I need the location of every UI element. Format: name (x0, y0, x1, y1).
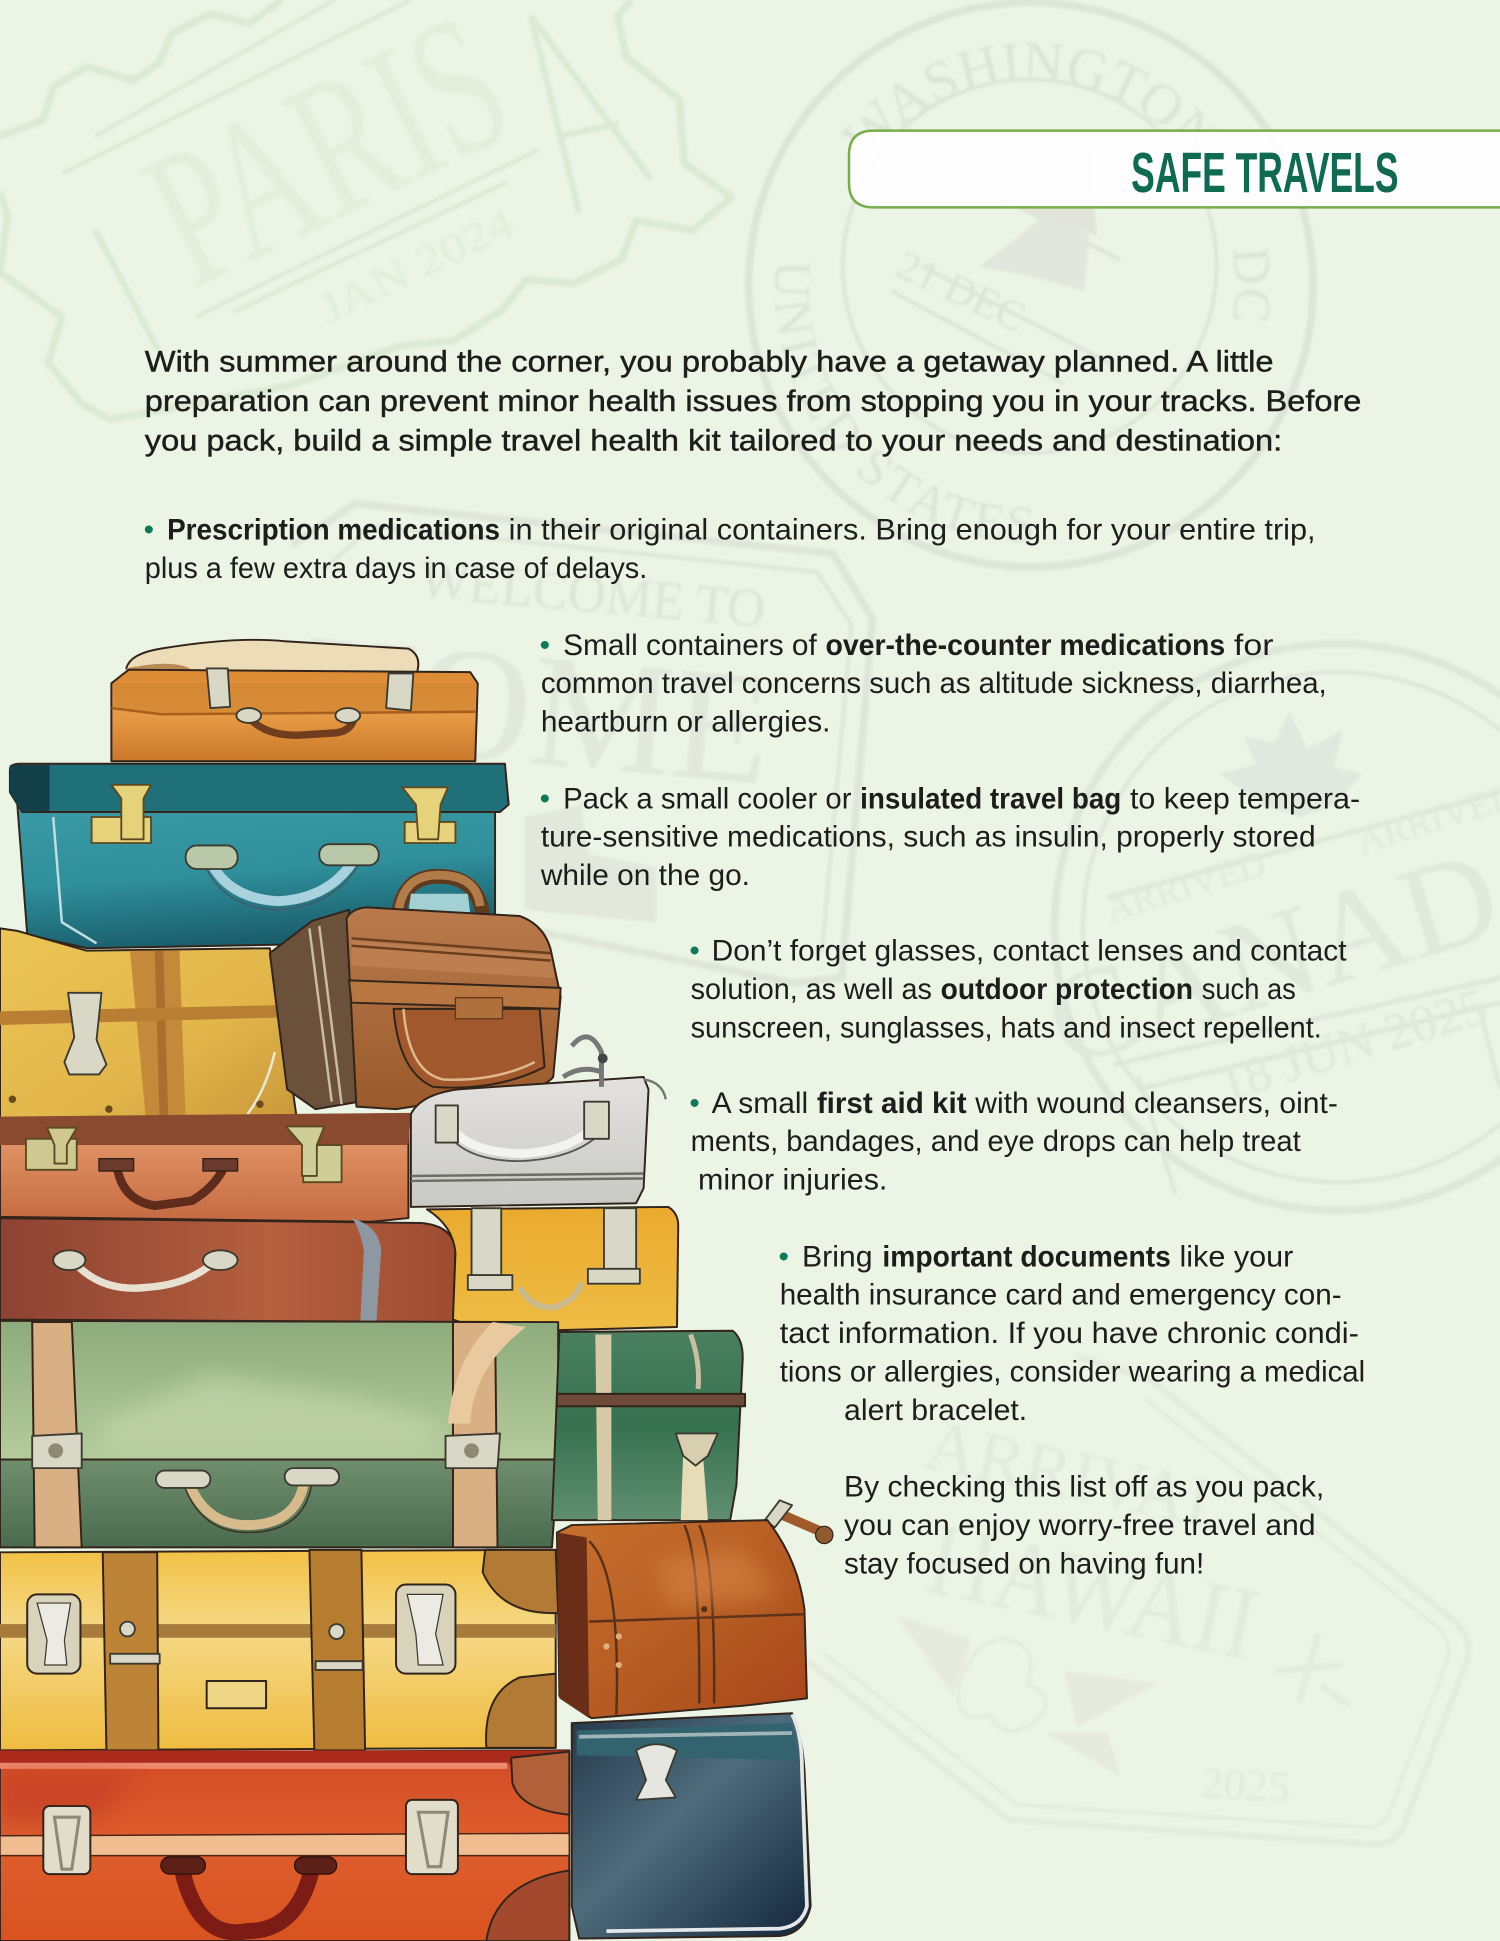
bullet: first aid kit: first aid kit (817, 1087, 967, 1120)
bullet: prescription medications: in their original containers. Bring enough for your entire trip, (509, 514, 1316, 547)
bullet: important documents: like your (1179, 1240, 1293, 1273)
text block: introduction (145, 345, 1361, 458)
bullet: important documents: alert bracelet. (844, 1394, 1027, 1427)
suitcase: large yellow (0, 1550, 558, 1750)
bullet: important documents: health insurance card and emergency con- (780, 1279, 1342, 1312)
text block: introduction: you pack, build a simple travel health kit tailored to your needs and destination: (145, 425, 1282, 458)
bullet: important documents: Bring (802, 1240, 873, 1273)
bullet: over-the-counter medications: common travel concerns such as altitude sickness, diarrhea, (541, 667, 1327, 700)
bullet: over-the-counter medications: • (540, 629, 550, 662)
stamp: Hawaii (804, 1355, 1469, 1844)
stamp: Paris: JAN 2024 (312, 200, 521, 333)
bullet: prescription medications: plus a few extra days in case of delays. (145, 552, 647, 585)
bullet: insulated travel bag: • (540, 782, 550, 815)
bag: brown satchel (270, 875, 561, 1109)
text block: introduction: With summer around the corner, you probably have a getaway planned. A little (145, 345, 1274, 378)
bullet: first aid kit: minor injuries. (698, 1164, 887, 1197)
suitcase: small yellow (427, 1207, 678, 1332)
bullet: outdoor protection: such as (1202, 973, 1296, 1006)
stamp: Canada: ARRIVED (1101, 843, 1271, 931)
stamp: Hawaii: ARRIVAL (919, 1404, 1238, 1547)
bullet: outdoor protection: Don’t forget glasses, contact lenses and contact (712, 935, 1347, 968)
stamp: Welcome to home (292, 504, 873, 983)
bullet: insulated travel bag: to keep tempera- (1130, 782, 1360, 815)
bullet: first aid kit: • (689, 1087, 700, 1120)
text block: closing: By checking this list off as you pack, (844, 1471, 1324, 1504)
suitcase: large green (0, 1321, 558, 1547)
heading banner (849, 131, 1500, 207)
stamp: Washington DC: UNITED STATES (775, 265, 1032, 542)
stamp: Hawaii: HAWAII (917, 1501, 1268, 1683)
bullet: first aid kit (689, 1087, 1338, 1197)
bullet: insulated travel bag: Pack a small cooler or (563, 782, 852, 815)
bullet: outdoor protection (689, 935, 1347, 1044)
bullet: outdoor protection: sunscreen, sunglasses, hats and insect repellent. (691, 1011, 1322, 1044)
bullet: prescription medications (144, 514, 1316, 585)
stamp: Welcome to home: HOME (294, 600, 778, 819)
suitcase: red (0, 1750, 569, 1941)
bullet: prescription medications: Prescription medications (167, 514, 500, 547)
bullet: important documents: tions or allergies, consider wearing a medical (780, 1355, 1365, 1388)
bullet: over-the-counter medications: for (1234, 629, 1274, 662)
bullet: over-the-counter medications: heartburn or allergies. (541, 706, 830, 739)
suitcase: brown trunk (557, 1500, 833, 1718)
suitcase: teal (10, 764, 509, 948)
suitcase: small green (552, 1331, 745, 1520)
bullet: outdoor protection: solution, as well as (691, 973, 932, 1006)
text block: introduction: preparation can prevent minor health issues from stopping you in your tracks. Before (145, 385, 1361, 418)
stamp: Washington DC: 21 DEC (889, 242, 1033, 342)
bullet: important documents: important documents (882, 1240, 1171, 1273)
bullet: important documents (778, 1240, 1365, 1427)
stamp: Washington DC (745, 0, 1316, 570)
bullet: outdoor protection: • (689, 935, 700, 968)
text block: closing: stay focused on having fun! (844, 1547, 1204, 1580)
bag: grey white (411, 1037, 666, 1207)
stamp: Canada: 18 JUN 2025 (1212, 978, 1494, 1113)
luggage stack illustration (0, 640, 833, 1941)
stamp: Washington DC: WASHINGTON (842, 43, 1216, 138)
stamp: Hawaii: 2025 (1200, 1757, 1292, 1812)
bullet: first aid kit: with wound cleansers, oint- (974, 1087, 1338, 1120)
bullet: over-the-counter medications (540, 629, 1327, 739)
text block: closing (844, 1471, 1324, 1580)
stamp: Washington DC: DC (1234, 250, 1268, 320)
bag: navy (572, 1713, 811, 1939)
bullet: over-the-counter medications: over-the-counter medications (825, 629, 1225, 662)
suitcase: orange (111, 668, 478, 761)
suitcase: mustard yellow (0, 928, 297, 1122)
bullet: first aid kit: A small (712, 1087, 808, 1120)
text block: closing: you can enjoy worry-free travel and (844, 1509, 1316, 1542)
suitcase: rust (0, 1113, 411, 1222)
bullet: outdoor protection: outdoor protection (941, 973, 1193, 1006)
stamp: Canada (1031, 644, 1500, 1211)
suitcase: cream cushion top (126, 640, 418, 676)
suitcase: long brown (0, 1218, 455, 1325)
bullet: prescription medications: • (144, 514, 154, 547)
bullet: insulated travel bag: insulated travel bag (860, 782, 1121, 815)
bullet: insulated travel bag (540, 782, 1360, 892)
stamp: Paris (0, 0, 731, 420)
bullet: insulated travel bag: ture-sensitive medications, such as insulin, properly stored (541, 821, 1316, 854)
stamp: Welcome to home: WELCOME TO (417, 548, 768, 639)
bullet: insulated travel bag: while on the go. (540, 859, 750, 892)
bullet: over-the-counter medications: Small containers of (563, 629, 818, 662)
bullet: first aid kit: ments, bandages, and eye drops can help treat (691, 1125, 1301, 1158)
bullet: important documents: • (778, 1240, 789, 1273)
bullet: important documents: tact information. If you have chronic condi- (780, 1317, 1359, 1350)
